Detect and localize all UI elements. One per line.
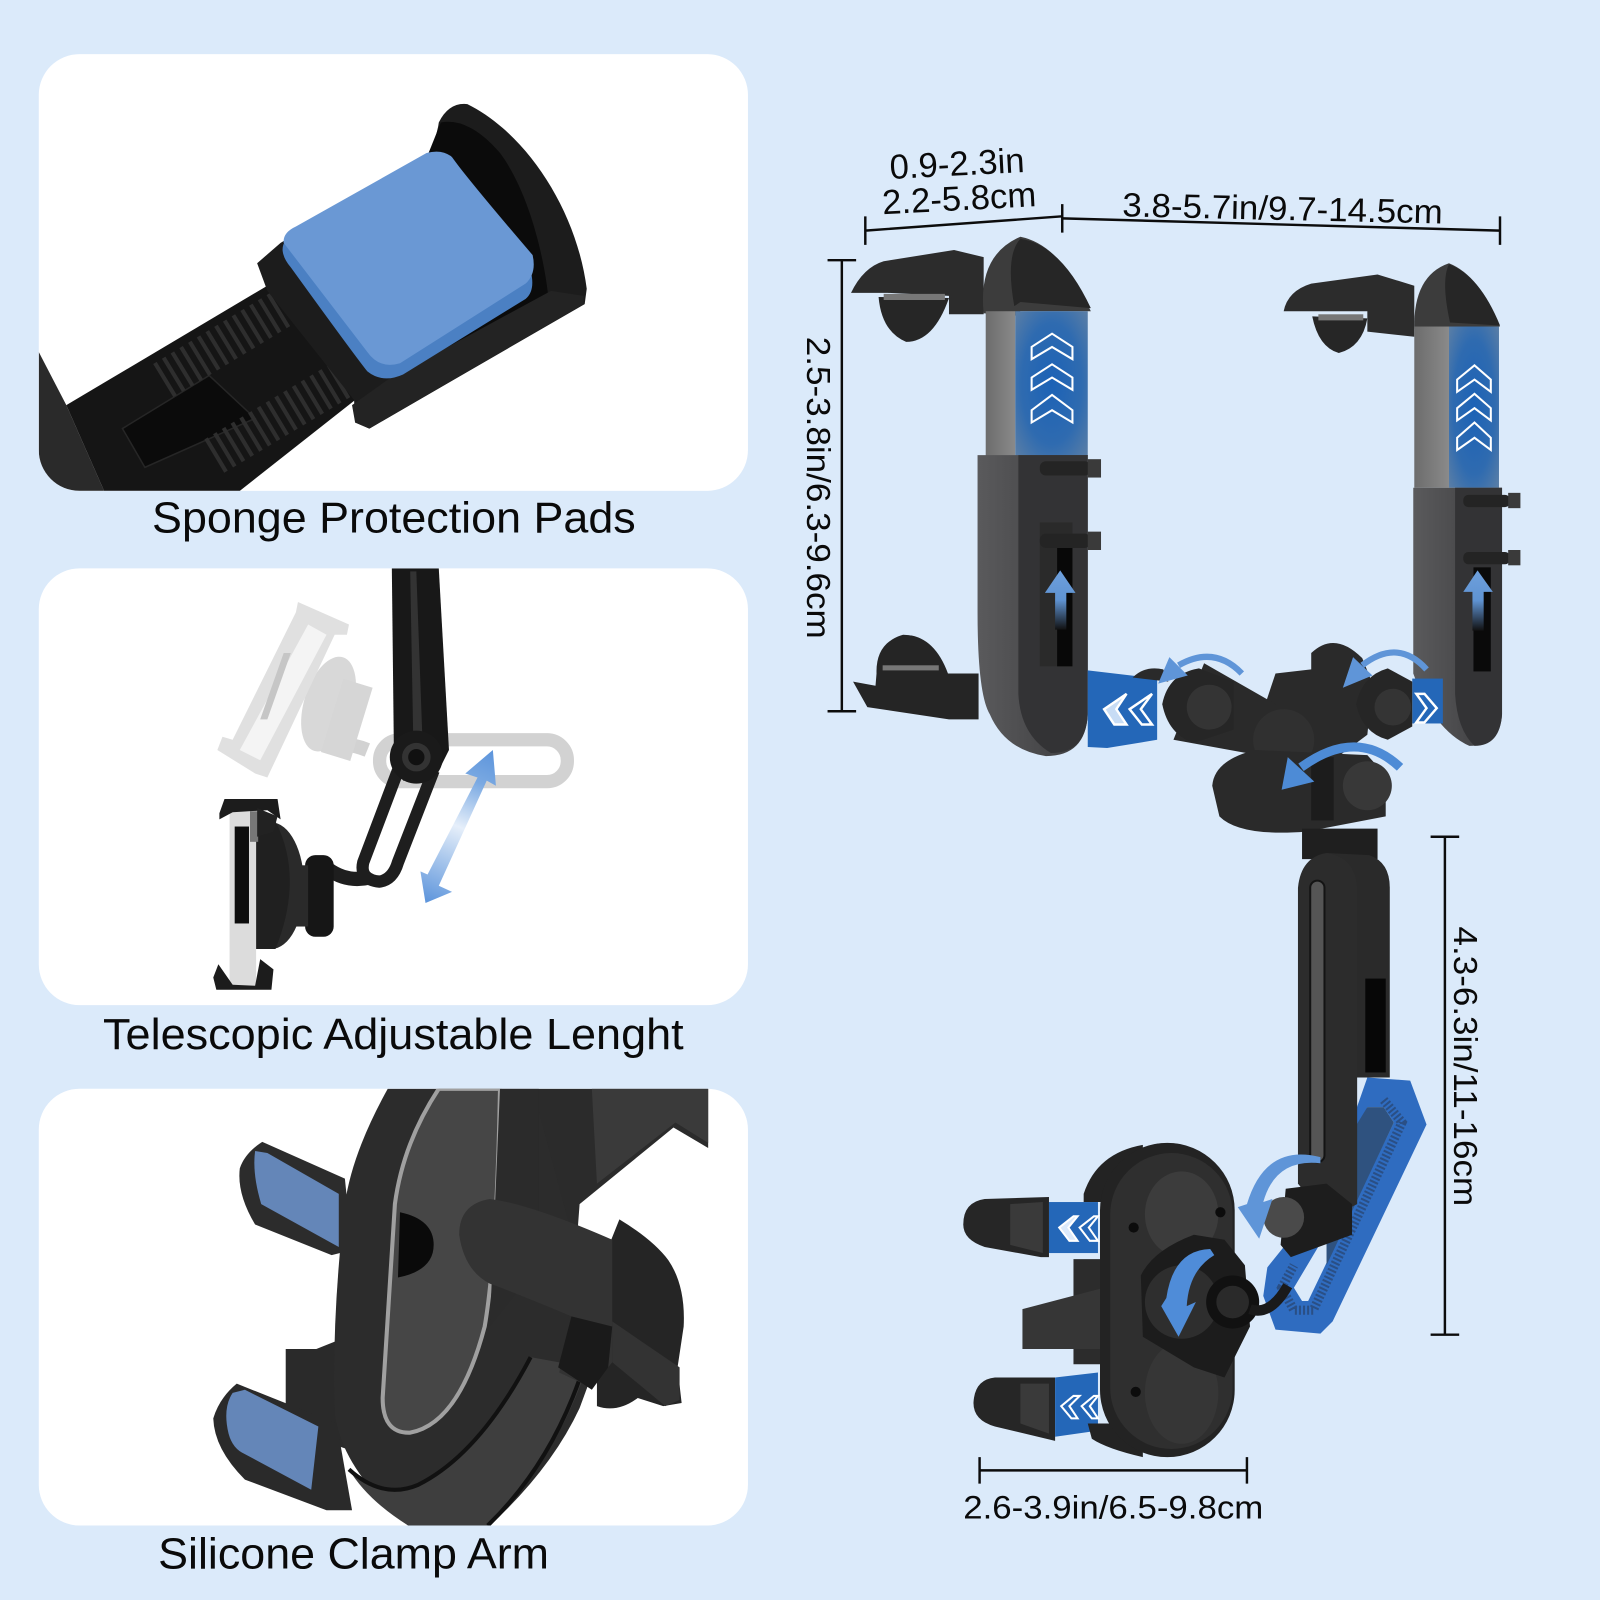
arrow: rotation lower arm xyxy=(1238,1154,1320,1239)
heading: Silicone Clamp Arm: Silicone Clamp Arm xyxy=(158,1529,549,1578)
dimension: holder width xyxy=(963,1457,1263,1525)
dimension: holder width: 2.6-3.9in/6.5-9.8cm xyxy=(963,1488,1263,1525)
lower hook xyxy=(853,635,979,719)
icon: connector chevrons xyxy=(1104,694,1437,724)
middle hook xyxy=(1073,1259,1100,1364)
holder head xyxy=(963,1143,1288,1457)
left upper clamp xyxy=(851,237,1101,756)
dimension: clamp spacing xyxy=(1062,187,1500,245)
blue adjustable loop arm xyxy=(1263,1078,1427,1334)
photo: close-up clamp arm xyxy=(213,1089,708,1526)
product: main mirror mount diagram xyxy=(851,237,1520,1457)
arrow: rotation centre xyxy=(1282,747,1400,790)
main lower arm xyxy=(1298,829,1390,1219)
panel: telescopic adjustable length xyxy=(39,568,748,1005)
icon: chevrons upper xyxy=(1059,1216,1098,1241)
icon: upper blue silicone pad xyxy=(239,1142,352,1255)
photo: mounted phone side view xyxy=(213,799,334,990)
dimension: clamp width: 0.9-2.3in xyxy=(889,142,1026,187)
icon: lower blue silicone pad xyxy=(213,1337,352,1510)
dimension: clamp height: 2.5-3.8in/6.3-9.6cm xyxy=(799,337,836,639)
oval back plate xyxy=(1100,1143,1235,1457)
icon: blue sponge pad xyxy=(283,152,532,378)
photo: lower slotted arm xyxy=(329,770,434,882)
dimension: arm length xyxy=(1431,837,1483,1335)
icon: white chevrons right xyxy=(1457,365,1491,450)
arrow: up slide right xyxy=(1463,570,1493,631)
icon: pivot knob xyxy=(390,731,443,784)
photo: clamp arm with blue sponge pad xyxy=(39,104,587,491)
arrow: rotation right xyxy=(1343,652,1427,688)
right upper clamp xyxy=(1284,263,1520,746)
hook lower xyxy=(973,1378,1055,1441)
dimension: clamp width: 2.2-5.8cm xyxy=(881,176,1037,222)
arrow: rotation left xyxy=(1158,657,1242,684)
heading: Sponge Protection Pads: Sponge Protection Pads xyxy=(152,494,636,543)
photo: screen panel with light border xyxy=(383,1089,500,1433)
arrow: rotation ball xyxy=(1161,1249,1214,1337)
ball mount knob xyxy=(1141,1235,1250,1378)
hook upper xyxy=(963,1197,1049,1257)
photo: upper arm xyxy=(392,568,449,781)
lower knob xyxy=(1263,1184,1352,1257)
photo: clamp handle xyxy=(459,1199,612,1388)
housing xyxy=(978,455,1088,756)
icon: chevrons lower xyxy=(1061,1396,1098,1418)
photo: ghost holder in raised position xyxy=(217,602,567,782)
dimension: clamp height xyxy=(799,260,856,711)
dimension: clamp spacing: 3.8-5.7in/9.7-14.5cm xyxy=(1122,187,1443,232)
heading: Telescopic Adjustable Lenght: Telescopic Adjustable Lenght xyxy=(103,1010,684,1059)
icon: white chevrons xyxy=(1032,334,1072,422)
centre joints xyxy=(1088,643,1443,833)
arrow: up slide xyxy=(1045,570,1076,630)
dimension: arm length: 4.3-6.3in/11-16cm xyxy=(1446,927,1483,1206)
photo: holder body xyxy=(334,1089,602,1526)
dimension: clamp width xyxy=(865,142,1062,245)
panel: sponge protection pads xyxy=(39,54,748,491)
panel: silicone clamp arm xyxy=(39,1089,748,1526)
arrow: telescopic double arrow xyxy=(420,750,496,903)
